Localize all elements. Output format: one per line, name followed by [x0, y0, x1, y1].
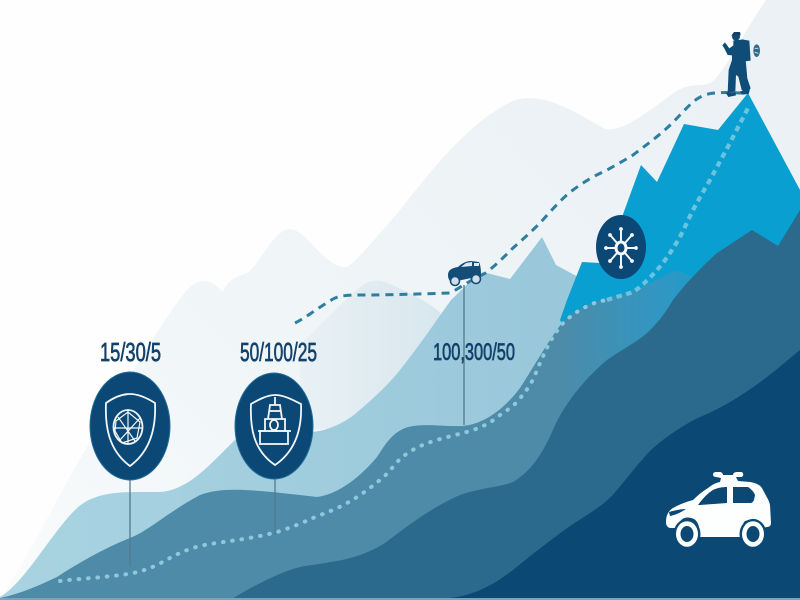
badge circle — [235, 373, 313, 479]
milestone 3: 100,300/50 — [433, 261, 515, 425]
milestone 1: 15/30/5 — [90, 337, 170, 567]
badge circle — [596, 215, 646, 279]
mountain layer: dark teal ridge — [230, 210, 800, 600]
label: 100,300/50 — [433, 339, 515, 366]
label: 50/100/25 — [240, 337, 317, 367]
dashed upper progress path — [607, 108, 748, 300]
milestone 2: 50/100/25 — [235, 337, 317, 535]
mountain layer: pale blue ridge — [300, 281, 480, 430]
badge circle — [90, 372, 170, 480]
dotted progress path — [60, 300, 607, 581]
icon: hiker on summit — [722, 32, 760, 97]
icon: white autonomous car — [666, 472, 771, 549]
dashed teal route line — [295, 93, 745, 323]
milestone 4: virus-like hub badge — [596, 215, 646, 279]
stem — [129, 478, 131, 567]
mountain layer: mid blue ridge — [0, 270, 760, 600]
stem — [274, 478, 276, 535]
mountain layer: darkest navy foreground — [440, 350, 800, 600]
mountain layer: bright blue peak — [560, 93, 800, 400]
icon: small car — [448, 261, 481, 286]
icon: hub with spokes — [604, 227, 638, 269]
label: 15/30/5 — [100, 337, 161, 367]
bottom edge strip — [0, 598, 800, 600]
stem — [463, 285, 465, 425]
icon: shield with stacked cargo — [251, 395, 301, 465]
icon: shield with web — [106, 394, 155, 466]
mountain layer: light blue ridge — [0, 237, 600, 600]
